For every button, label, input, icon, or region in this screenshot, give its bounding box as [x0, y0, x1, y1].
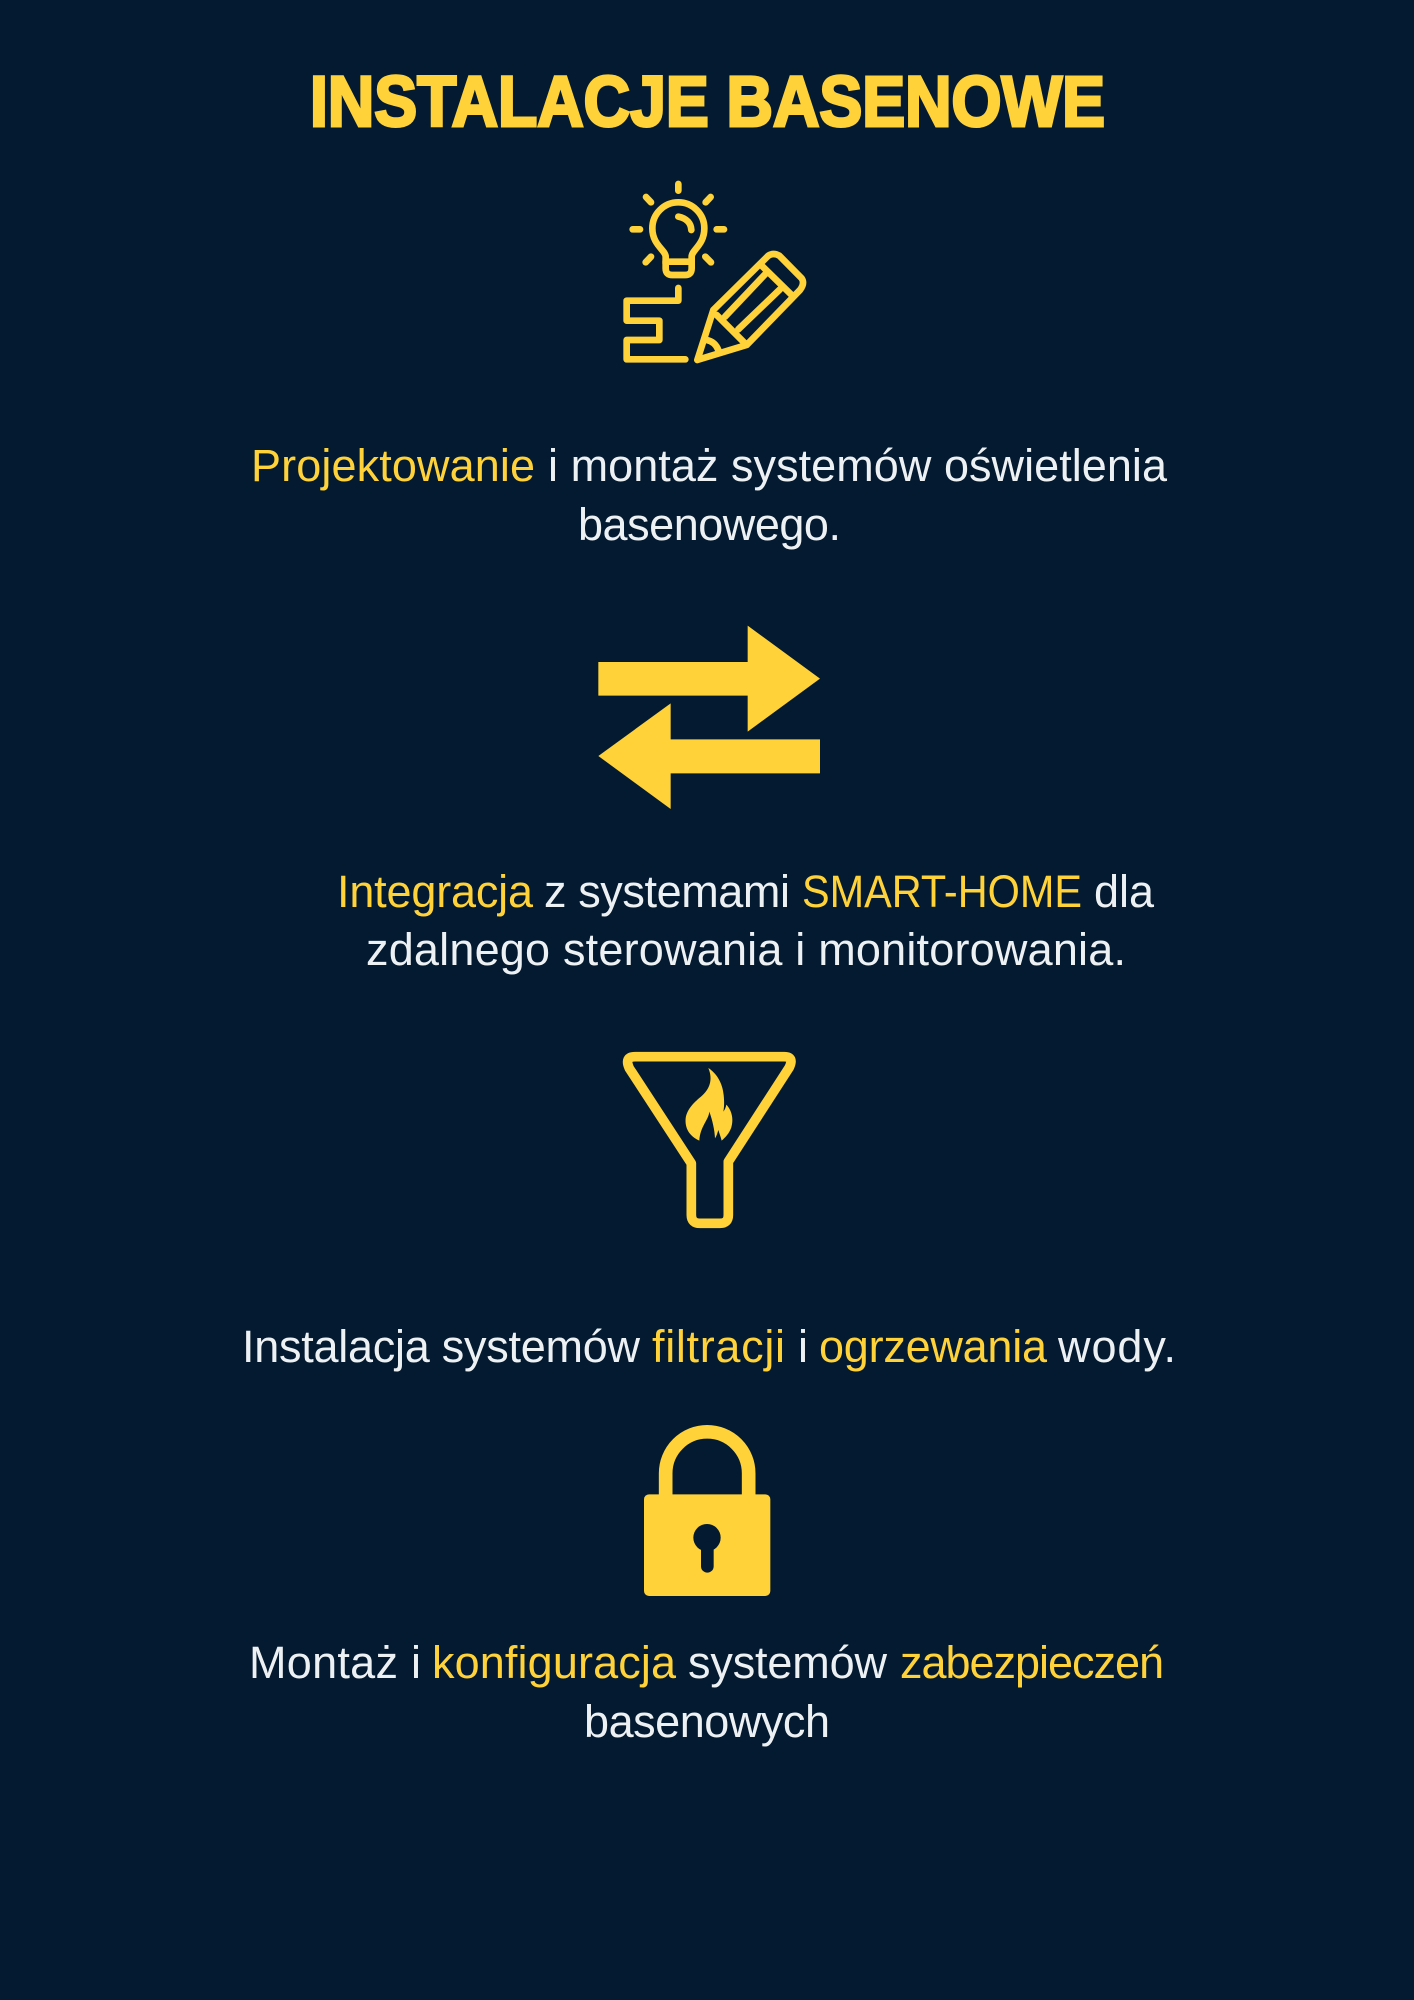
text block: lighting: Projektowanie [251, 440, 535, 491]
text block: filtration and heating: wody. [1057, 1321, 1176, 1372]
text block: smart-home integration: zdalnego sterowania i monitorowania. [366, 924, 1126, 975]
text block: security systems [249, 1637, 1164, 1747]
text block: security systems: konfiguracja [432, 1637, 677, 1688]
text block: smart-home integration: z systemami [544, 866, 790, 917]
text block: filtration and heating: i [798, 1321, 808, 1372]
text block: filtration and heating: filtracji [652, 1321, 785, 1372]
text block: smart-home integration: Integracja [337, 866, 534, 917]
text block: filtration and heating [242, 1321, 1176, 1372]
text block: security systems: zabezpieczeń [900, 1637, 1164, 1688]
text block: smart-home integration [337, 866, 1155, 975]
text block: lighting: basenowego. [578, 499, 841, 550]
text block: security systems: systemów [688, 1637, 888, 1688]
text block: smart-home integration: SMART-HOME [802, 866, 1082, 917]
text block: lighting: i montaż systemów oświetlenia [548, 440, 1168, 491]
text block: smart-home integration: dla [1094, 866, 1155, 917]
text block: filtration and heating: ogrzewania [819, 1321, 1048, 1372]
text block: lighting [251, 440, 1168, 550]
text block: security systems: basenowych [584, 1696, 830, 1747]
title: INSTALACJE BASENOWE [310, 63, 1105, 142]
icon: padlock [644, 1432, 770, 1596]
text block: filtration and heating: Instalacja systemów [242, 1321, 640, 1372]
icon: funnel with flame [628, 1057, 791, 1223]
icon: exchange arrows [598, 626, 820, 809]
text block: security systems: Montaż i [249, 1637, 421, 1688]
icon: light bulb and pencil [627, 184, 803, 360]
